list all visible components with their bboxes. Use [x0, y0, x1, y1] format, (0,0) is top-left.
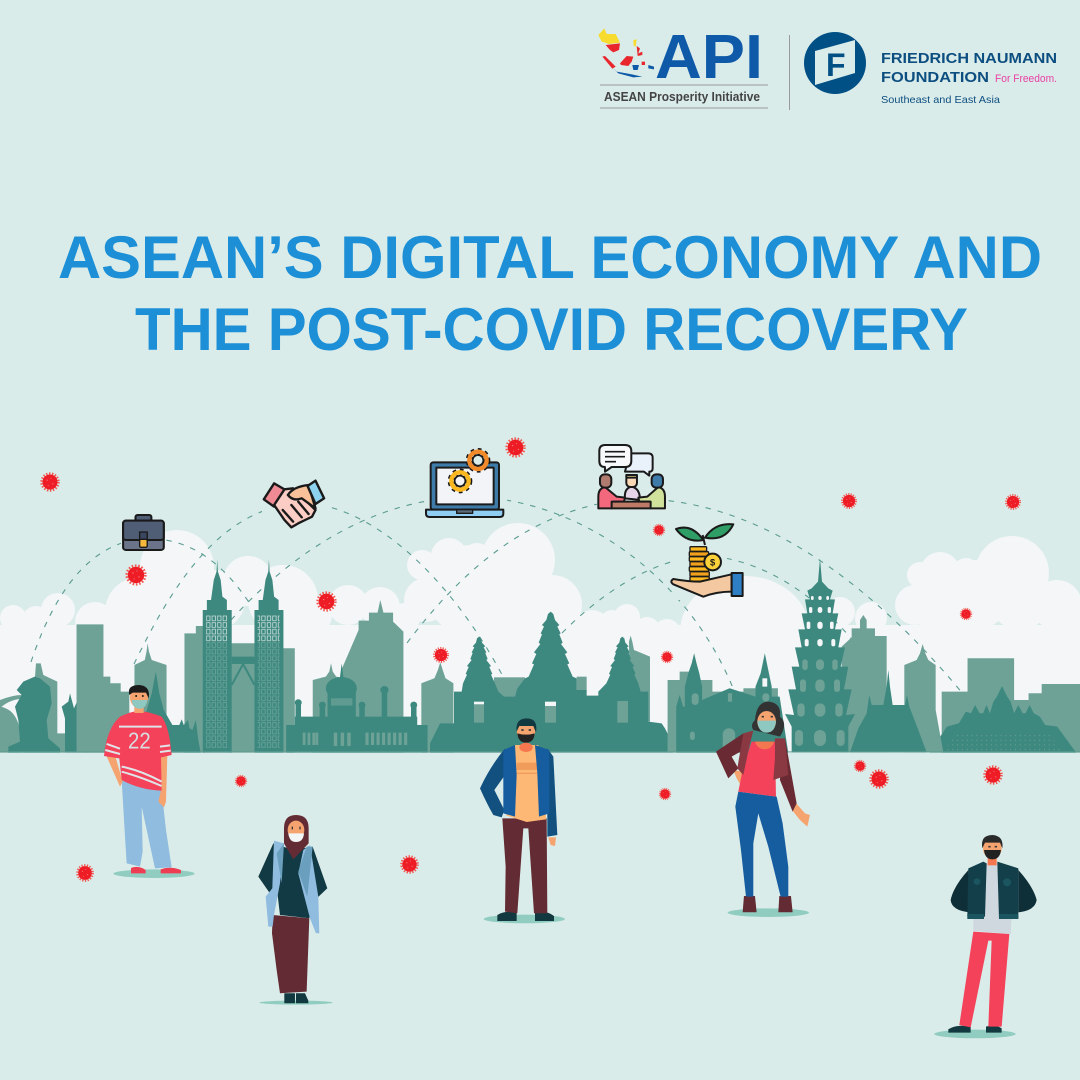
light buildings [842, 615, 943, 752]
church belfry [762, 678, 767, 687]
shoes [948, 1025, 1002, 1033]
icon: F roundel: F [826, 47, 846, 83]
rule [600, 84, 768, 86]
person: woman in maroon jacket [716, 702, 810, 917]
icon: laptop with gears [426, 451, 503, 517]
jacket sleeves [716, 733, 797, 812]
jacket hems and details [967, 914, 1018, 919]
title: THE POST-COVID RECOVERY [135, 296, 968, 363]
jacket panels [737, 731, 788, 780]
icon: ASEAN map [598, 28, 654, 77]
face [288, 821, 304, 839]
person: man in red 22 jersey [104, 685, 195, 878]
light backdrop [494, 636, 650, 722]
shadow [728, 908, 809, 917]
trousers [959, 932, 1009, 1027]
neck [988, 857, 997, 865]
boots [497, 912, 554, 921]
icon: hand with coins and plant [671, 524, 743, 597]
person: man in dark jacket and red trousers [934, 835, 1037, 1038]
arms [106, 755, 167, 807]
Borobudur texture [943, 732, 1064, 753]
icon: hand with coins and plant: $ [710, 557, 716, 567]
logo: Friedrich Naumann Foundation [804, 32, 1057, 106]
t-shirt [973, 863, 1012, 934]
head [517, 720, 535, 741]
neckline [755, 742, 774, 749]
jersey stripes [105, 727, 171, 786]
head [983, 838, 1002, 859]
temple windows [474, 701, 628, 723]
skyline left [77, 559, 453, 753]
viruses [41, 438, 1020, 881]
API wordmark: API [655, 23, 763, 92]
boots [743, 896, 793, 912]
eyes [292, 827, 300, 829]
icon: discussion group [598, 445, 665, 508]
light buildings [668, 658, 1080, 753]
t-shirt [505, 745, 546, 822]
pagoda lower arches [795, 659, 845, 746]
skyline right [668, 653, 1080, 753]
hijab [284, 815, 309, 859]
temple silhouette [430, 612, 673, 753]
dark landmarks [145, 559, 428, 753]
shadow [259, 1001, 333, 1005]
jersey [104, 712, 172, 791]
tower windows [206, 615, 280, 748]
pagoda [785, 558, 855, 752]
clouds [0, 523, 1080, 752]
sweater [258, 843, 327, 918]
rule [600, 107, 768, 109]
arms [480, 748, 557, 837]
hands [548, 837, 556, 846]
stupa gate [80, 731, 91, 753]
mosque windows [303, 698, 407, 746]
eyes [762, 714, 773, 719]
title [58, 224, 1042, 363]
jersey number: 22 [128, 728, 151, 754]
skyline left edge: merlion and Lao stupa [0, 663, 109, 753]
coat [266, 841, 319, 933]
jacket [967, 862, 1018, 918]
jeans [735, 792, 788, 897]
title: ASEAN’S DIGITAL ECONOMY AND [58, 224, 1042, 291]
trousers [502, 818, 547, 913]
shoes [131, 867, 181, 873]
slogan: For Freedom. [995, 73, 1057, 85]
sleeves [951, 870, 1037, 912]
merlion [8, 677, 60, 753]
boots [284, 993, 308, 1003]
ground line [0, 751, 1080, 752]
dark landmarks [676, 653, 1076, 753]
skyline centre: Angkor temple with three towers [430, 612, 673, 753]
mask [288, 833, 304, 842]
light backdrop [0, 663, 65, 753]
shadow [934, 1030, 1016, 1038]
icon: F roundel [804, 32, 866, 94]
foundation name line 1: FRIEDRICH NAUMANN [881, 51, 1057, 67]
head [752, 702, 784, 737]
pagoda white arches [805, 596, 835, 646]
region: Southeast and East Asia [881, 94, 1000, 106]
shadow [484, 915, 565, 923]
skyline right: pagoda, Thai temple and towers [785, 558, 943, 752]
hands [733, 770, 810, 827]
Lao stupa [62, 677, 109, 753]
mask [757, 721, 776, 733]
light buildings [77, 600, 453, 753]
icon: handshake [264, 481, 324, 527]
logo: ASEAN Prosperity Initiative [598, 23, 768, 108]
trousers [122, 780, 172, 868]
API full name: ASEAN Prosperity Initiative [604, 90, 760, 104]
jacket [503, 745, 549, 817]
Thai temple [850, 670, 927, 752]
church windows [690, 693, 769, 753]
shirt stripes [517, 763, 537, 770]
logo divider [788, 35, 790, 110]
neck [519, 743, 533, 752]
icon: briefcase [123, 515, 164, 550]
window highlights [474, 702, 556, 706]
coat lapels [277, 843, 313, 897]
foundation name line 2: FOUNDATION [881, 70, 989, 86]
top [738, 742, 776, 797]
dashed arcs connecting icons [31, 497, 972, 705]
shadow [113, 869, 195, 878]
person: woman in hijab [258, 815, 333, 1005]
head [134, 705, 144, 713]
person: bearded man in blue jacket [480, 718, 565, 923]
skirt [272, 915, 309, 993]
